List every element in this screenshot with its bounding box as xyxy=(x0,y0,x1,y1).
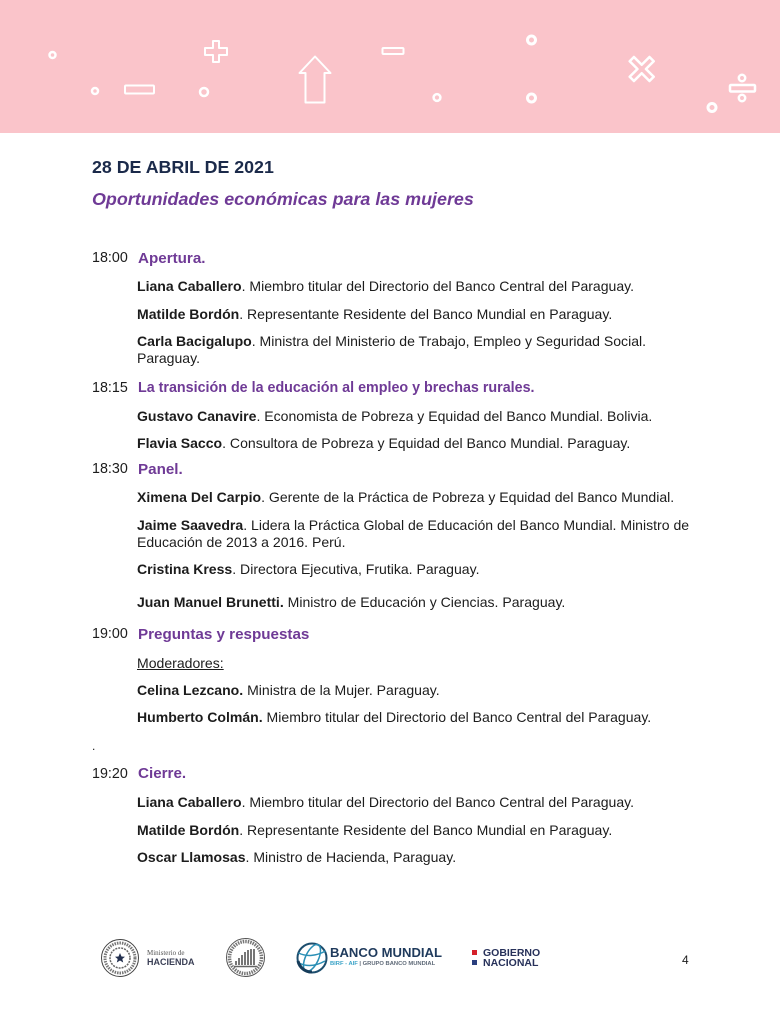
date heading: 28 DE ABRIL DE 2021 xyxy=(92,157,274,177)
time 19:00: 19:00 xyxy=(92,626,128,642)
time 18:15: 18:15 xyxy=(92,380,128,396)
speaker: Ximena Del Carpio. Gerente de la Práctica de Pobreza y Equidad del Banco Mundial. xyxy=(137,489,674,505)
speaker: Flavia Sacco. Consultora de Pobreza y Equidad del Banco Mundial. Paraguay. xyxy=(137,435,630,451)
speaker: Liana Caballero. Miembro titular del Directorio del Banco Central del Paraguay. xyxy=(137,278,634,294)
speaker: Oscar Llamosas. Ministro de Hacienda, Paraguay. xyxy=(137,849,456,865)
speaker: Cristina Kress. Directora Ejecutiva, Frutika. Paraguay. xyxy=(137,561,479,577)
page number: 4 xyxy=(682,953,689,967)
section heading: transition: La transición de la educación al empleo y brechas rurales. xyxy=(138,380,534,396)
section heading: Apertura: Apertura. xyxy=(138,250,206,267)
logo: Gobierno Nacional: NACIONAL xyxy=(483,957,538,969)
logo: Ministerio de Hacienda seal xyxy=(101,939,139,977)
speaker: Liana Caballero. Miembro titular del Directorio del Banco Central del Paraguay. xyxy=(137,794,634,810)
speaker: Jaime Saavedra. Lidera la Práctica Global de Educación del Banco Mundial. Ministro de Educación de 2013 a 2016. Perú. xyxy=(137,517,689,550)
logo text: Banco Mundial xyxy=(330,945,442,967)
stray dot: . xyxy=(92,739,95,753)
icon: small circles xyxy=(50,36,716,112)
time 18:00: 18:00 xyxy=(92,250,128,266)
section heading: Cierre: Cierre. xyxy=(138,765,186,782)
header banner with math symbols xyxy=(0,0,780,133)
icon: plus sign xyxy=(205,41,227,62)
logo: Banco Mundial globe xyxy=(296,942,328,974)
logo: Banco Central seal xyxy=(226,938,265,977)
icon: minus signs xyxy=(125,48,404,94)
moderators label: Moderadores: xyxy=(137,655,224,671)
logo text: Ministerio de Hacienda xyxy=(147,949,195,967)
logo text: Ministerio de Hacienda: HACIENDA xyxy=(147,957,195,967)
speaker: Juan Manuel Brunetti. Ministro de Educación y Ciencias. Paraguay. xyxy=(137,594,565,610)
moderator: Humberto Colmán. Miembro titular del Directorio del Banco Central del Paraguay. xyxy=(137,709,651,725)
subtitle: Oportunidades económicas para las mujeres xyxy=(92,189,474,209)
time 18:30: 18:30 xyxy=(92,461,128,477)
speaker: Carla Bacigalupo. Ministra del Ministerio de Trabajo, Empleo y Seguridad Social. Paraguay. xyxy=(137,333,646,366)
section heading: Q&A: Preguntas y respuestas xyxy=(138,626,309,643)
logo: Gobierno Nacional xyxy=(472,947,540,969)
logo text: Banco Mundial: BIRF - AIF | GRUPO BANCO MUNDIAL xyxy=(330,961,435,967)
speaker: Matilde Bordón. Representante Residente del Banco Mundial en Paraguay. xyxy=(137,822,612,838)
time 19:20: 19:20 xyxy=(92,766,128,782)
logo text: Ministerio de Hacienda: Ministerio de xyxy=(147,949,185,957)
icon: up arrow xyxy=(300,56,330,102)
section heading: Panel: Panel. xyxy=(138,461,183,478)
icon: division sign xyxy=(730,75,755,101)
moderator: Celina Lezcano. Ministra de la Mujer. Paraguay. xyxy=(137,682,440,698)
logo: Gobierno Nacional: GOBIERNO xyxy=(483,947,540,959)
speaker: Matilde Bordón. Representante Residente del Banco Mundial en Paraguay. xyxy=(137,306,612,322)
speaker: Gustavo Canavire. Economista de Pobreza y Equidad del Banco Mundial. Bolivia. xyxy=(137,408,652,424)
icon: multiplication sign xyxy=(622,49,661,89)
logo text: Banco Mundial: BANCO MUNDIAL xyxy=(330,945,442,960)
